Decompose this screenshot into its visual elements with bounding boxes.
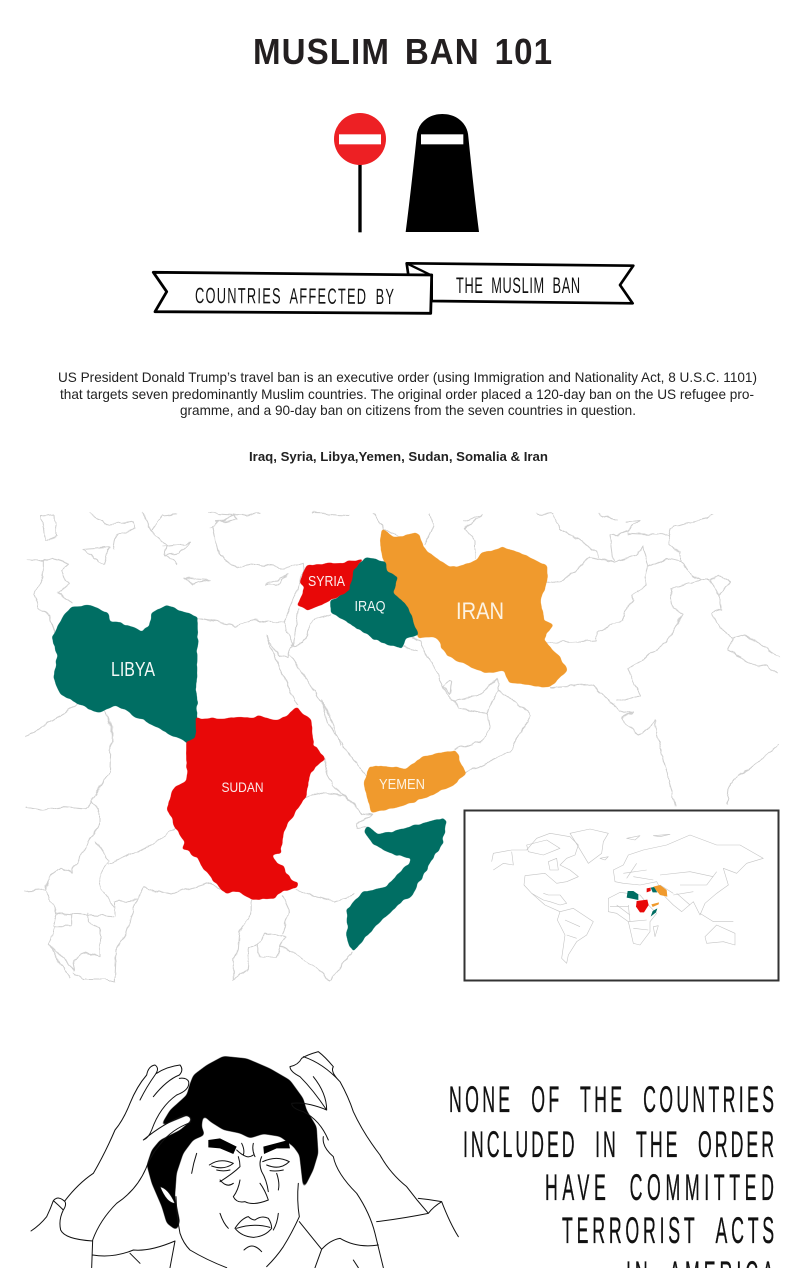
left hand and arm bbox=[31, 1065, 191, 1268]
statement text: NONE OF THE COUNTRIES bbox=[449, 1080, 774, 1121]
intro paragraph: US President Donald Trump’s travel ban is an executive order (using Immigration and Nationality Act, 8 U.S.C. 1101) bbox=[58, 369, 757, 385]
statement text: INCLUDED IN THE ORDER bbox=[463, 1125, 774, 1166]
illustration: man with hands on head bbox=[31, 1052, 458, 1268]
country: sudan bbox=[168, 708, 324, 899]
map base: north-west borders bbox=[27, 513, 400, 745]
intro paragraph bbox=[58, 369, 757, 418]
country: yemen: YEMEN bbox=[379, 776, 425, 793]
icon: no-entry sign bbox=[334, 113, 386, 232]
intro paragraph: that targets seven predominantly Muslim countries. The original order placed a 120-day ban on the US refugee pro- bbox=[60, 386, 754, 402]
list of countries: Iraq, Syria, Libya,Yemen, Sudan, Somalia & Iran bbox=[249, 449, 548, 464]
map base: african borders bbox=[25, 700, 372, 980]
statement text: TERRORIST ACTS bbox=[562, 1211, 774, 1252]
country: sudan: SUDAN bbox=[222, 779, 264, 795]
icon: no-entry sign and veiled figure bbox=[334, 113, 479, 232]
country: syria bbox=[298, 560, 362, 610]
title: MUSLIM BAN 101 bbox=[253, 33, 552, 72]
country: iran: IRAN bbox=[456, 598, 504, 625]
map of affected countries bbox=[25, 513, 778, 980]
right hand and arm bbox=[290, 1052, 458, 1268]
ribbon: the muslim ban bbox=[407, 263, 633, 303]
ear bbox=[160, 1187, 175, 1203]
statement text bbox=[449, 1080, 774, 1268]
country: yemen bbox=[365, 751, 465, 812]
facial features bbox=[176, 1143, 299, 1268]
icon: veiled figure bbox=[406, 114, 479, 232]
country: libya: LIBYA bbox=[111, 659, 156, 681]
intro paragraph: gramme, and a 90-day ban on citizens from the seven countries in question. bbox=[180, 402, 636, 418]
inset: world outlines bbox=[492, 829, 763, 963]
ribbon: the muslim ban: THE MUSLIM BAN bbox=[456, 273, 580, 298]
ribbon: countries affected by bbox=[153, 272, 432, 313]
country: libya bbox=[53, 606, 197, 742]
eyebrows bbox=[208, 1138, 290, 1154]
map base: central asia and gulf borders bbox=[400, 513, 778, 805]
country: iraq bbox=[330, 557, 418, 648]
country: iraq: IRAQ bbox=[354, 599, 386, 615]
hair bbox=[147, 1056, 318, 1231]
country: iran bbox=[380, 530, 566, 687]
country: somalia bbox=[348, 819, 446, 950]
inset world map bbox=[464, 810, 778, 980]
country: syria: SYRIA bbox=[308, 574, 345, 590]
inset: highlighted countries bbox=[627, 885, 667, 917]
ribbon: countries affected by: COUNTRIES AFFECTED BY bbox=[195, 283, 394, 309]
ribbon banner bbox=[153, 263, 633, 313]
statement text: HAVE COMMITTED bbox=[545, 1168, 774, 1209]
